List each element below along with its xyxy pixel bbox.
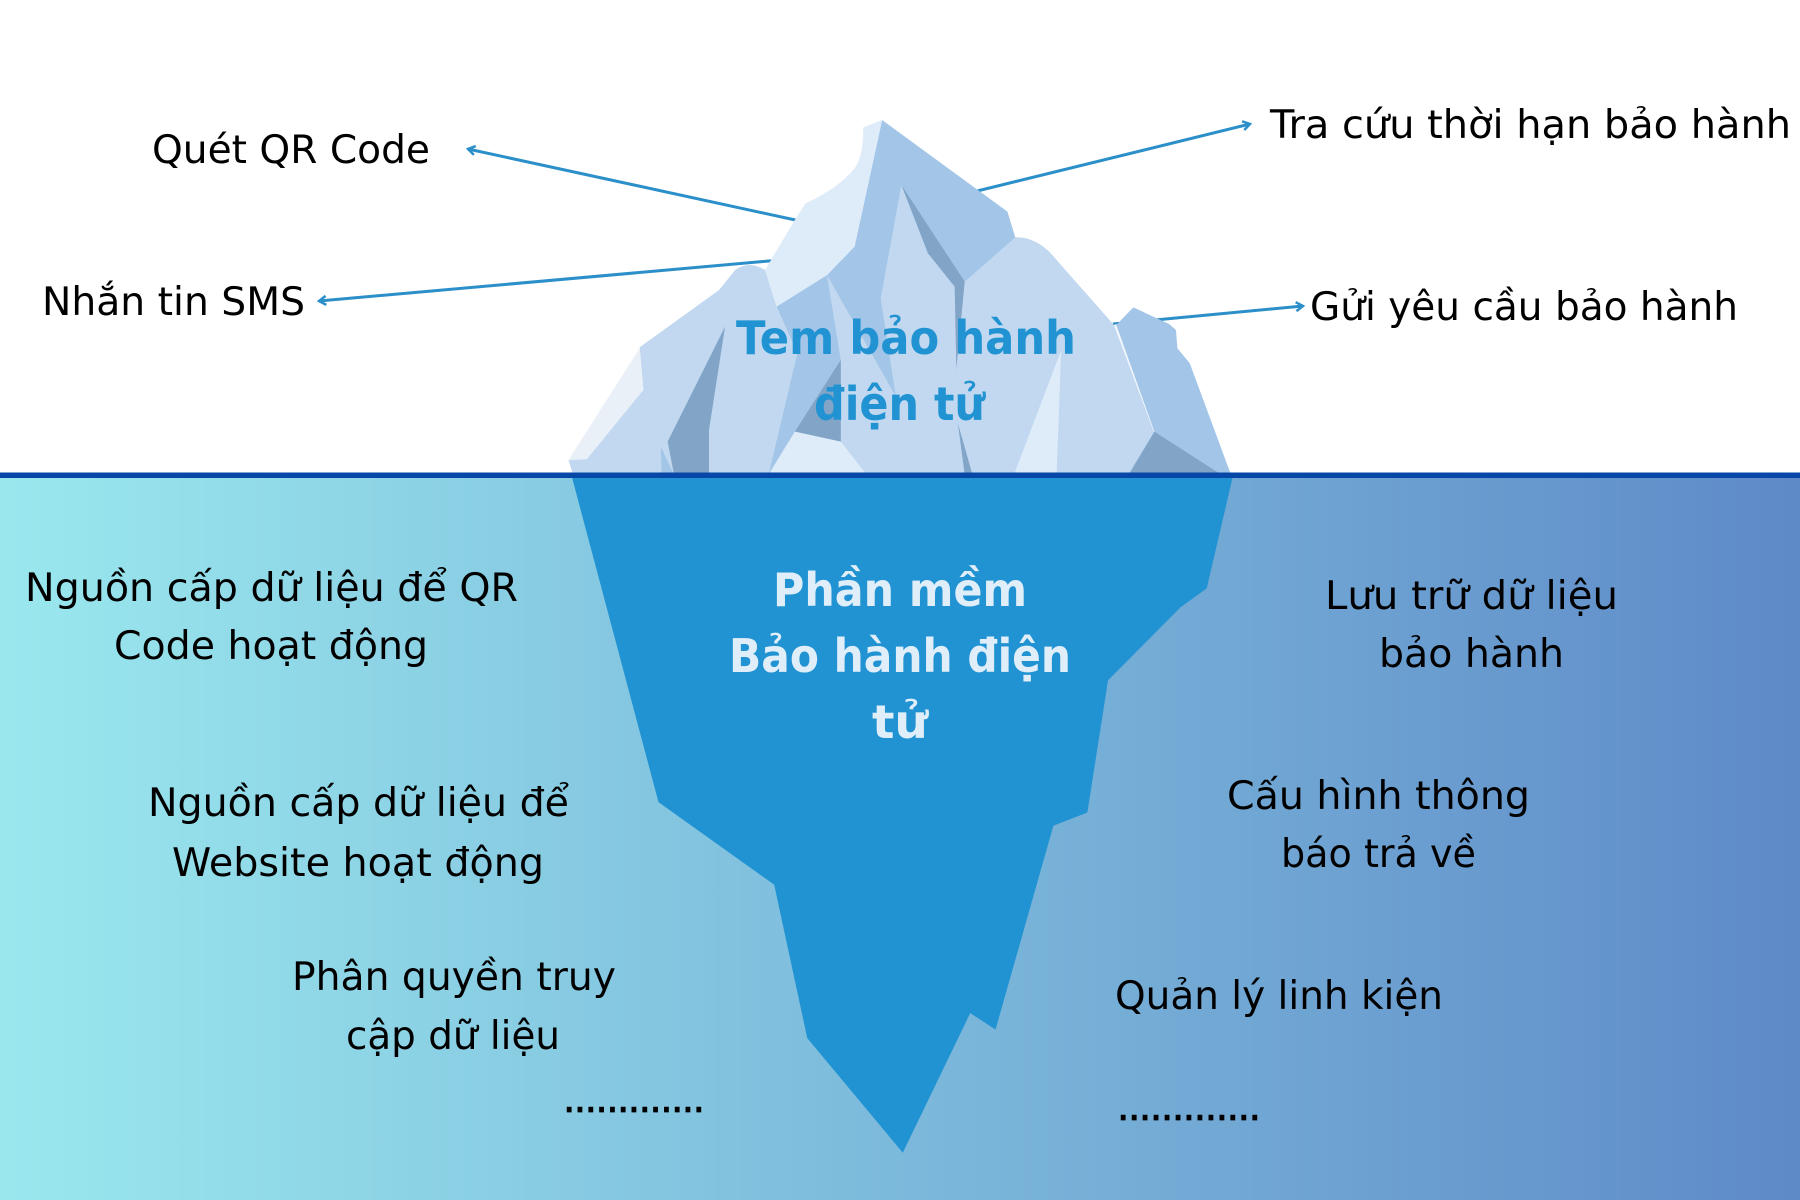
text: Cấu hình thông báo trả về: báo trả về [1281,832,1476,877]
text: Nguồn cấp dữ liệu để Website hoạt động [148,781,569,886]
text: right dots: ............. [1117,1085,1261,1130]
text: Lưu trữ dữ liệu bảo hành: Lưu trữ dữ liệu [1325,574,1618,619]
label: Nhắn tin SMS: Nhắn tin SMS [42,280,305,325]
arrow: to Quét QR Code [468,149,800,221]
text: Phân quyền truy cập dữ liệu: Phân quyền truy [292,955,616,1000]
arrow: to Tra cứu thời hạn bảo hành [965,124,1250,194]
text: Nguồn cấp dữ liệu để Website hoạt động: Nguồn cấp dữ liệu để [148,781,569,826]
heading: Tem bảo hành điện tử: Tem bảo hành [736,311,1076,365]
iceberg above water [568,120,1231,475]
text: Phân quyền truy cập dữ liệu: cập dữ liệu [346,1014,560,1059]
heading: Phần mềm Bảo hành điện tử: Bảo hành điện [729,629,1071,683]
arrow: to Gửi yêu cầu bảo hành [1113,306,1303,324]
label: Quét QR Code: Quét QR Code [152,128,430,173]
label: Tra cứu thời hạn bảo hành: Tra cứu thời hạn bảo hành [1269,103,1791,148]
iceberg below water [572,478,1232,1153]
text: Nguồn cấp dữ liệu để QR Code hoạt động: Nguồn cấp dữ liệu để QR [25,566,518,611]
heading: Tem bảo hành điện tử [736,311,1076,431]
text: Nguồn cấp dữ liệu để Website hoạt động: Website hoạt động [172,841,544,886]
text: left dots: ............. [563,1077,705,1122]
text: Lưu trữ dữ liệu bảo hành: bảo hành [1379,632,1564,677]
background: white sky [0,0,1800,476]
arrow: to Nhắn tin SMS [319,260,780,301]
text: Cấu hình thông báo trả về: Cấu hình thông [1227,774,1530,819]
water line [0,472,1800,478]
text: Lưu trữ dữ liệu bảo hành [1325,574,1618,677]
text: Quản lý linh kiện: Quản lý linh kiện [1115,974,1443,1019]
background: sea gradient [0,476,1800,1200]
heading: Tem bảo hành điện tử: điện tử [814,377,986,431]
text: Phân quyền truy cập dữ liệu [292,955,616,1059]
text: Nguồn cấp dữ liệu để QR Code hoạt động [25,566,518,669]
label: Gửi yêu cầu bảo hành: Gửi yêu cầu bảo hành [1310,285,1738,330]
heading: Phần mềm Bảo hành điện tử: tử [872,695,929,749]
heading: Phần mềm Bảo hành điện tử [729,563,1071,749]
text: Nguồn cấp dữ liệu để QR Code hoạt động: Code hoạt động [114,624,428,669]
text: Cấu hình thông báo trả về [1227,774,1530,877]
heading: Phần mềm Bảo hành điện tử: Phần mềm [773,563,1027,617]
